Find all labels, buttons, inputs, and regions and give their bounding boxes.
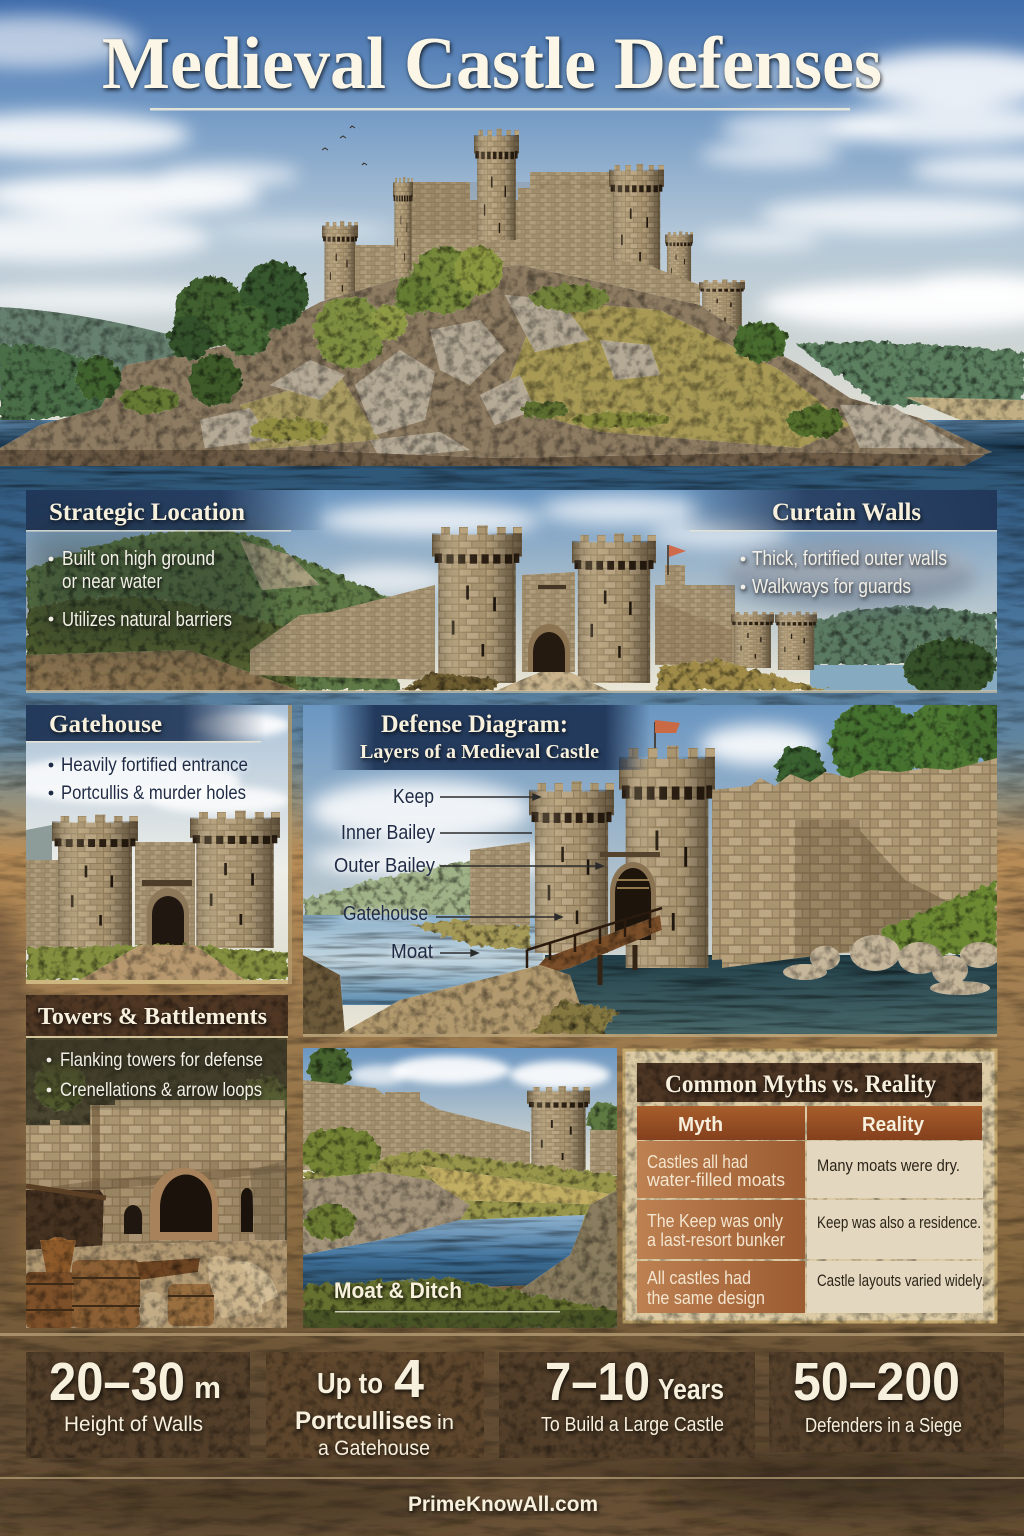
diagram labels and arrows: Gatehouse — [343, 903, 428, 925]
stat: wall height: m — [194, 1370, 221, 1405]
bullets: gatehouse: Heavily fortified entrance — [61, 754, 248, 776]
title: Medieval Castle Defenses — [102, 23, 882, 105]
label: moat and ditch: Moat & Ditch — [334, 1278, 462, 1303]
bullets: strategic location: Utilizes natural barriers — [62, 609, 232, 631]
background texture — [0, 470, 1024, 1536]
bullets: strategic location: Built on high ground — [62, 548, 215, 570]
stat: portcullises: Portcullises — [295, 1407, 432, 1435]
stat: defenders: Defenders in a Siege — [805, 1414, 962, 1437]
panel: towers and battlements — [26, 995, 289, 1328]
bullets: strategic location — [49, 548, 232, 631]
heading: defense diagram: Layers of a Medieval Castle — [360, 741, 599, 763]
diagram labels and arrows: Outer Bailey — [334, 855, 435, 877]
bullets: towers — [47, 1049, 263, 1101]
stat: defenders — [769, 1352, 1004, 1452]
bullets: strategic location: or near water — [62, 571, 162, 593]
bullets: curtain walls: Thick, fortified outer walls — [752, 548, 947, 570]
reality cells: Castle layouts varied widely. — [817, 1271, 985, 1290]
stat: portcullises: Up to — [317, 1368, 383, 1400]
table header — [637, 1106, 982, 1140]
table header: Myth — [678, 1114, 723, 1136]
heading bar: towers and battlements — [26, 995, 288, 1036]
stat: years to build — [499, 1352, 755, 1458]
reality cells — [807, 1141, 985, 1313]
myth cells: a last-resort bunker — [647, 1230, 785, 1250]
stat: defenders: 50–200 — [793, 1352, 960, 1412]
main castle — [322, 129, 745, 330]
myth cells: All castles had — [647, 1268, 751, 1288]
stat: portcullises: 4 — [394, 1349, 424, 1409]
stat: portcullises: a Gatehouse — [318, 1437, 430, 1460]
panel: moat and ditch — [300, 1046, 623, 1328]
footer: PrimeKnowAll.com — [408, 1493, 598, 1516]
bullets: gatehouse — [49, 754, 248, 804]
table header: Reality — [862, 1114, 925, 1136]
heading bar: towers and battlements: Towers & Battlements — [38, 1004, 267, 1030]
reality cells: Many moats were dry. — [817, 1156, 960, 1175]
heading: gatehouse: Gatehouse — [49, 711, 162, 738]
heading bar: myths table: Common Myths vs. Reality — [665, 1071, 936, 1098]
reality cells: Keep was also a residence. — [817, 1213, 981, 1232]
myth cells: The Keep was only — [647, 1211, 783, 1231]
diagram labels and arrows: Keep — [393, 786, 434, 808]
bullets: gatehouse: Portcullis & murder holes — [61, 782, 246, 804]
stat: wall height — [26, 1352, 250, 1458]
myth cells — [637, 1141, 805, 1313]
myth cells: Castles all had — [647, 1152, 748, 1172]
stat: years to build: 7–10 — [545, 1352, 650, 1412]
bullets: towers: Crenellations & arrow loops — [60, 1079, 262, 1101]
myth cells: the same design — [647, 1288, 765, 1308]
stat: wall height: Height of Walls — [64, 1413, 203, 1436]
heading bar: myths table — [637, 1063, 982, 1102]
diagram labels and arrows: Moat — [391, 941, 433, 963]
stat: portcullises: in — [437, 1412, 454, 1434]
panel: defense diagram — [303, 698, 1022, 1037]
heading: defense diagram: Defense Diagram: — [381, 711, 568, 738]
hero scene: castle on rocky island — [0, 0, 1024, 490]
island hill — [0, 246, 992, 468]
panel: gatehouse — [0, 705, 292, 984]
stat: portcullises — [266, 1349, 484, 1460]
heading: strategic location: Strategic Location — [49, 499, 245, 526]
stat: years to build: Years — [658, 1374, 724, 1406]
stat: wall height: 20–30 — [49, 1352, 185, 1412]
panel: common myths vs reality — [624, 1050, 996, 1322]
myth cells: water-filled moats — [646, 1170, 785, 1190]
panel: strategic location and curtain walls — [26, 490, 997, 698]
stat: years to build: To Build a Large Castle — [541, 1413, 724, 1436]
heading: defense diagram — [360, 711, 599, 763]
diagram labels and arrows: Inner Bailey — [341, 822, 435, 844]
bullets: curtain walls: Walkways for guards — [752, 576, 911, 598]
heading: curtain walls: Curtain Walls — [772, 499, 921, 526]
bullets: curtain walls — [741, 548, 947, 598]
bullets: towers: Flanking towers for defense — [60, 1049, 263, 1071]
diagram labels and arrows — [334, 786, 603, 963]
